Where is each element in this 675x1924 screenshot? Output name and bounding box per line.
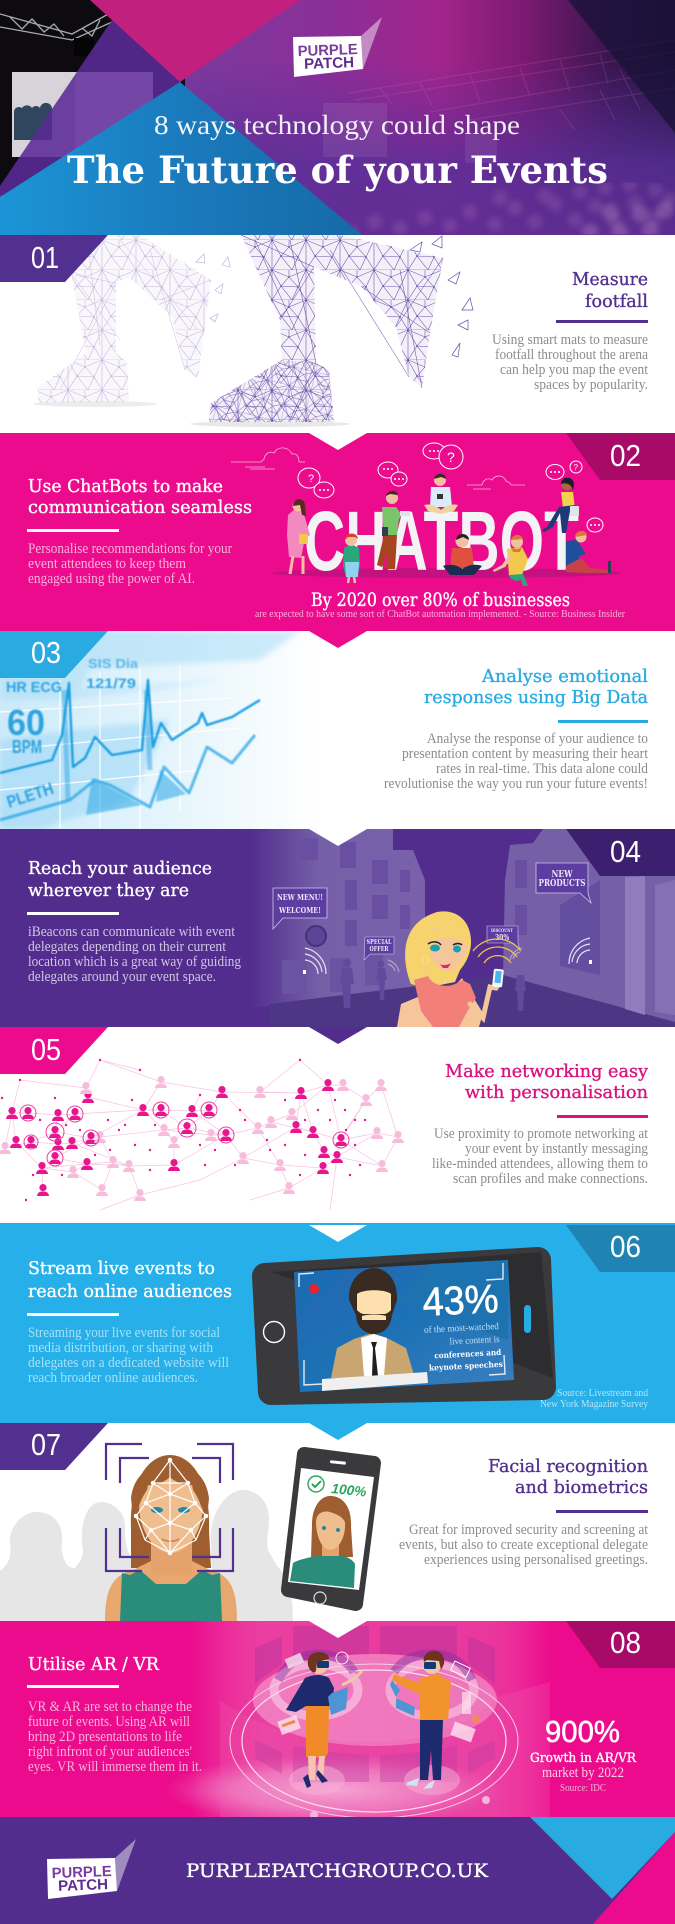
body text: reach broader online audiences.: [28, 1370, 198, 1386]
sign: special offer: SPECIAL: [366, 938, 392, 946]
panel: 04 ibeacons: [0, 829, 675, 1027]
source: [540, 1388, 649, 1410]
illustration: people network: [0, 1060, 404, 1210]
illustration: ECG monitor: 60: [7, 702, 45, 743]
panel: 02 chatbots: [0, 433, 675, 631]
title: The Future of your Events: [67, 148, 608, 192]
panel: header: [0, 0, 675, 252]
tag 03: 03: [31, 635, 61, 670]
body text: Personalise recommendations for your: [28, 541, 232, 557]
man standing: [377, 491, 410, 569]
heading: Reach your audience: [28, 858, 212, 879]
viewfinder corners: [299, 1263, 505, 1385]
sign: discount: 30%: [495, 932, 509, 942]
divider: [27, 1313, 119, 1316]
woman in VR: [286, 1652, 362, 1788]
footer logo: [47, 1839, 136, 1899]
body text: media distribution, or sharing with: [28, 1340, 214, 1356]
panel: 06 streaming: [0, 1223, 675, 1423]
body text: delegates around your event space.: [28, 969, 216, 985]
subtitle: 8 ways technology could shape: [154, 110, 520, 140]
phone: [288, 1454, 374, 1604]
heading: [28, 858, 212, 901]
website: PURPLEPATCHGROUP.CO.UK: [186, 1860, 489, 1882]
divider: [556, 320, 648, 323]
desk: [322, 1372, 428, 1391]
tag 08: 08: [610, 1625, 641, 1660]
stat: live content is: [449, 1335, 500, 1348]
tag 01: 01: [31, 240, 59, 275]
logo: [293, 17, 382, 77]
tag 04: [566, 829, 675, 876]
body text: [28, 924, 241, 985]
body text: eyes. VR will immerse them in it.: [28, 1759, 202, 1775]
sign: discount: [487, 926, 520, 950]
illustration: phone with live stream: [264, 1252, 553, 1392]
dark stage background: [0, 0, 185, 195]
tag 02: [566, 433, 675, 480]
sign: new menu: [273, 888, 327, 946]
body text: [432, 1126, 648, 1187]
holographic rings: [274, 1664, 358, 1716]
tag 06: [566, 1225, 675, 1272]
body text: experiences using personalised greetings.: [424, 1552, 648, 1568]
illustration: ECG monitor: HR ECG: [6, 679, 62, 696]
stat: 900%: [530, 1714, 637, 1794]
faint screens: [323, 103, 387, 157]
stat: 900%: Growth in AR/VR: [530, 1751, 637, 1766]
illustration: chatbot people: [231, 443, 622, 588]
illustration: VR users: [165, 1621, 550, 1826]
magenta triangle: [90, 0, 300, 82]
illustration: ECG monitor: PLETH: [4, 779, 56, 812]
body text: event attendees to keep them: [28, 556, 187, 572]
heading: Utilise AR / VR: [28, 1654, 159, 1675]
stat: conferences and: [434, 1347, 502, 1360]
sign: new products: NEW: [552, 870, 573, 880]
body text: delegates on a dedicated website will: [28, 1355, 229, 1371]
truss lines: [0, 12, 112, 40]
body text: right infront of your audiences': [28, 1744, 192, 1760]
stat: keynote speeches: [429, 1359, 504, 1373]
woman top right: [542, 478, 579, 533]
divider: [556, 1510, 648, 1513]
body text: [492, 332, 649, 393]
pink triangle: [593, 1832, 675, 1924]
body text: bring 2D presentations to life: [28, 1729, 182, 1745]
woman left: [287, 499, 310, 574]
floor panels: [255, 1626, 495, 1782]
blue triangle: [530, 1817, 675, 1899]
panel: 05 networking: [0, 1027, 648, 1210]
body text: spaces by popularity.: [534, 377, 648, 393]
heading: Measure: [572, 269, 648, 290]
clouds: [231, 448, 525, 489]
man right: [566, 531, 611, 573]
notch: [309, 1027, 367, 1044]
woman with phone: [397, 911, 521, 1027]
body text: Streaming your live events for social: [28, 1325, 220, 1341]
body text: [28, 1699, 202, 1775]
body text: iBeacons can communicate with event: [28, 924, 235, 940]
ceiling trusses: [349, 40, 675, 130]
illustration: wireframe feet: [33, 235, 475, 427]
heading: [424, 666, 648, 708]
body text: presentation content by measuring their heart: [402, 746, 648, 762]
stat: By 2020 over 80% of businesses: [311, 590, 570, 611]
speech bubbles: [298, 443, 603, 532]
illustration: ECG monitor: SIS Dia: [88, 656, 139, 671]
blue polygon: [0, 82, 362, 252]
verified check: 100%: [331, 1480, 368, 1500]
platform: [253, 1654, 497, 1746]
stat: 900%: 900%: [545, 1714, 620, 1749]
body text: [28, 541, 232, 587]
panel: 01 measure footfall: [0, 235, 675, 433]
stat: of the most-watched: [424, 1321, 499, 1336]
notch: [309, 1621, 367, 1638]
silhouettes: [0, 1490, 293, 1621]
tag 07: 07: [31, 1427, 61, 1462]
panel: 07 facial recognition: [0, 1423, 675, 1621]
body text: Great for improved security and screening at: [409, 1522, 648, 1538]
body text: [399, 1522, 648, 1568]
footer logo: PATCH: [58, 1876, 108, 1895]
tag 02: 02: [610, 438, 641, 473]
presenter: [331, 1268, 416, 1382]
panel: 08 AR / VR: [0, 1621, 675, 1826]
man in VR: [390, 1651, 451, 1789]
footer logo: PURPLE: [51, 1863, 112, 1882]
stage screen photo: [12, 72, 153, 157]
dark corner: [568, 0, 675, 133]
illustration: ECG monitor: [0, 631, 320, 829]
tag 06: 06: [610, 1229, 641, 1264]
stat: [421, 1277, 504, 1373]
sign: discount: DISCOUNT: [491, 928, 514, 934]
man center: [443, 534, 482, 575]
divider: [558, 720, 648, 723]
logo: PURPLE: [297, 41, 358, 60]
heading: Analyse emotional: [481, 666, 648, 687]
divider: [557, 1115, 648, 1118]
heading: Make networking easy: [445, 1061, 649, 1082]
tag 01: [0, 235, 108, 282]
heading: footfall: [585, 291, 648, 312]
crowd silhouette: [350, 185, 670, 232]
kid: [343, 533, 360, 583]
body text: [28, 1325, 229, 1386]
heading: [28, 476, 252, 518]
notch: [309, 433, 367, 450]
body text: can help you map the event: [500, 362, 648, 378]
side slot: [524, 1305, 531, 1333]
tag 05: [0, 1027, 108, 1074]
heading: and biometrics: [515, 1477, 648, 1498]
wifi icons: [305, 938, 590, 974]
stat: 43%: [421, 1277, 500, 1325]
screen: [294, 1260, 514, 1392]
heading: reach online audiences: [28, 1281, 232, 1302]
tag 03: [0, 631, 108, 678]
source: are expected to have some sort of ChatBot automation implemented. - Source: Business Insider: [255, 609, 625, 620]
panel: 03 big data: [0, 631, 675, 829]
sign: new products: [536, 863, 591, 903]
heading: wherever they are: [28, 880, 189, 901]
notch: [309, 829, 367, 846]
heading: [445, 1061, 649, 1103]
heading: Facial recognition: [488, 1456, 648, 1477]
tag 05: 05: [31, 1032, 61, 1067]
heading: with personalisation: [465, 1082, 648, 1103]
body text: like-minded attendees, allowing them to: [432, 1156, 648, 1172]
notch: [309, 631, 367, 648]
source: New York Magazine Survey: [540, 1399, 649, 1410]
body text: Use proximity to promote networking at: [434, 1126, 648, 1142]
body text: [384, 731, 649, 792]
rings: [230, 1664, 518, 1818]
body text: VR & AR are set to change the: [28, 1699, 192, 1715]
illustration: face scan: [0, 1444, 374, 1621]
illustration: street scene: [250, 829, 675, 1027]
sign: special offer: [364, 937, 394, 960]
heading: [572, 269, 648, 312]
heading: communication seamless: [28, 497, 252, 518]
purple triangle overlay: [0, 20, 181, 197]
stat: 900%: Source: IDC: [560, 1783, 606, 1794]
body text: location which is a great way of guiding: [28, 954, 241, 970]
scan brackets: [106, 1444, 233, 1571]
heading: [28, 1258, 232, 1302]
sign: special offer: OFFER: [370, 945, 389, 953]
tag 04: 04: [610, 834, 641, 869]
verified check: [307, 1475, 366, 1496]
home button: [264, 1322, 284, 1342]
body text: footfall throughout the arena: [495, 347, 649, 363]
heading: Stream live events to: [28, 1258, 215, 1279]
tag 07: [0, 1423, 108, 1470]
body text: engaged using the power of AI.: [28, 571, 195, 587]
body text: your event by instantly messaging: [465, 1141, 648, 1157]
rec dot: [309, 1284, 319, 1294]
logo: PATCH: [304, 54, 354, 73]
illustration: ECG monitor: BPM: [12, 737, 42, 757]
heading: responses using Big Data: [424, 687, 648, 708]
passers-by: [340, 968, 526, 1011]
panel: footer: [0, 1817, 675, 1924]
divider: [27, 1685, 119, 1688]
foot spots: [289, 1765, 345, 1795]
tag 08: [566, 1621, 675, 1668]
sign: new menu: NEW MENU!: [277, 892, 323, 902]
notch: [309, 1225, 367, 1242]
body text: Using smart mats to measure: [492, 332, 648, 348]
illustration: chatbot people: ?: [308, 473, 314, 485]
body text: revolutionise the way you run your future events!: [384, 776, 648, 792]
sign: new products: PRODUCTS: [538, 879, 586, 889]
face mesh: [136, 1460, 206, 1553]
notch: [309, 1423, 367, 1440]
sitting top: [424, 474, 458, 514]
floating icons: [277, 1652, 480, 1742]
body text: delegates depending on their current: [28, 939, 226, 955]
body text: rates in real-time. This data alone could: [436, 761, 649, 777]
body text: scan profiles and make connections.: [453, 1171, 648, 1187]
woman: [105, 1455, 237, 1621]
illustration: chatbot people: ?: [574, 463, 578, 472]
man yellow: [493, 535, 528, 586]
illustration: chatbot people: ?: [447, 449, 455, 465]
heading: Use ChatBots to make: [28, 476, 223, 497]
body text: Analyse the response of your audience to: [427, 731, 648, 747]
selfie woman: [290, 1496, 355, 1588]
divider: [27, 529, 119, 532]
ground: [272, 568, 622, 578]
heading: [488, 1456, 648, 1498]
illustration: ECG monitor: 121/79: [86, 675, 136, 691]
source: Source: Livestream and: [557, 1388, 649, 1399]
sign: new menu: WELCOME!: [278, 905, 321, 915]
body text: future of events. Using AR will: [28, 1714, 190, 1730]
body text: events, but also to create exceptional delegate: [399, 1537, 648, 1553]
divider: [27, 912, 119, 915]
stat: 900%: market by 2022: [542, 1765, 624, 1781]
